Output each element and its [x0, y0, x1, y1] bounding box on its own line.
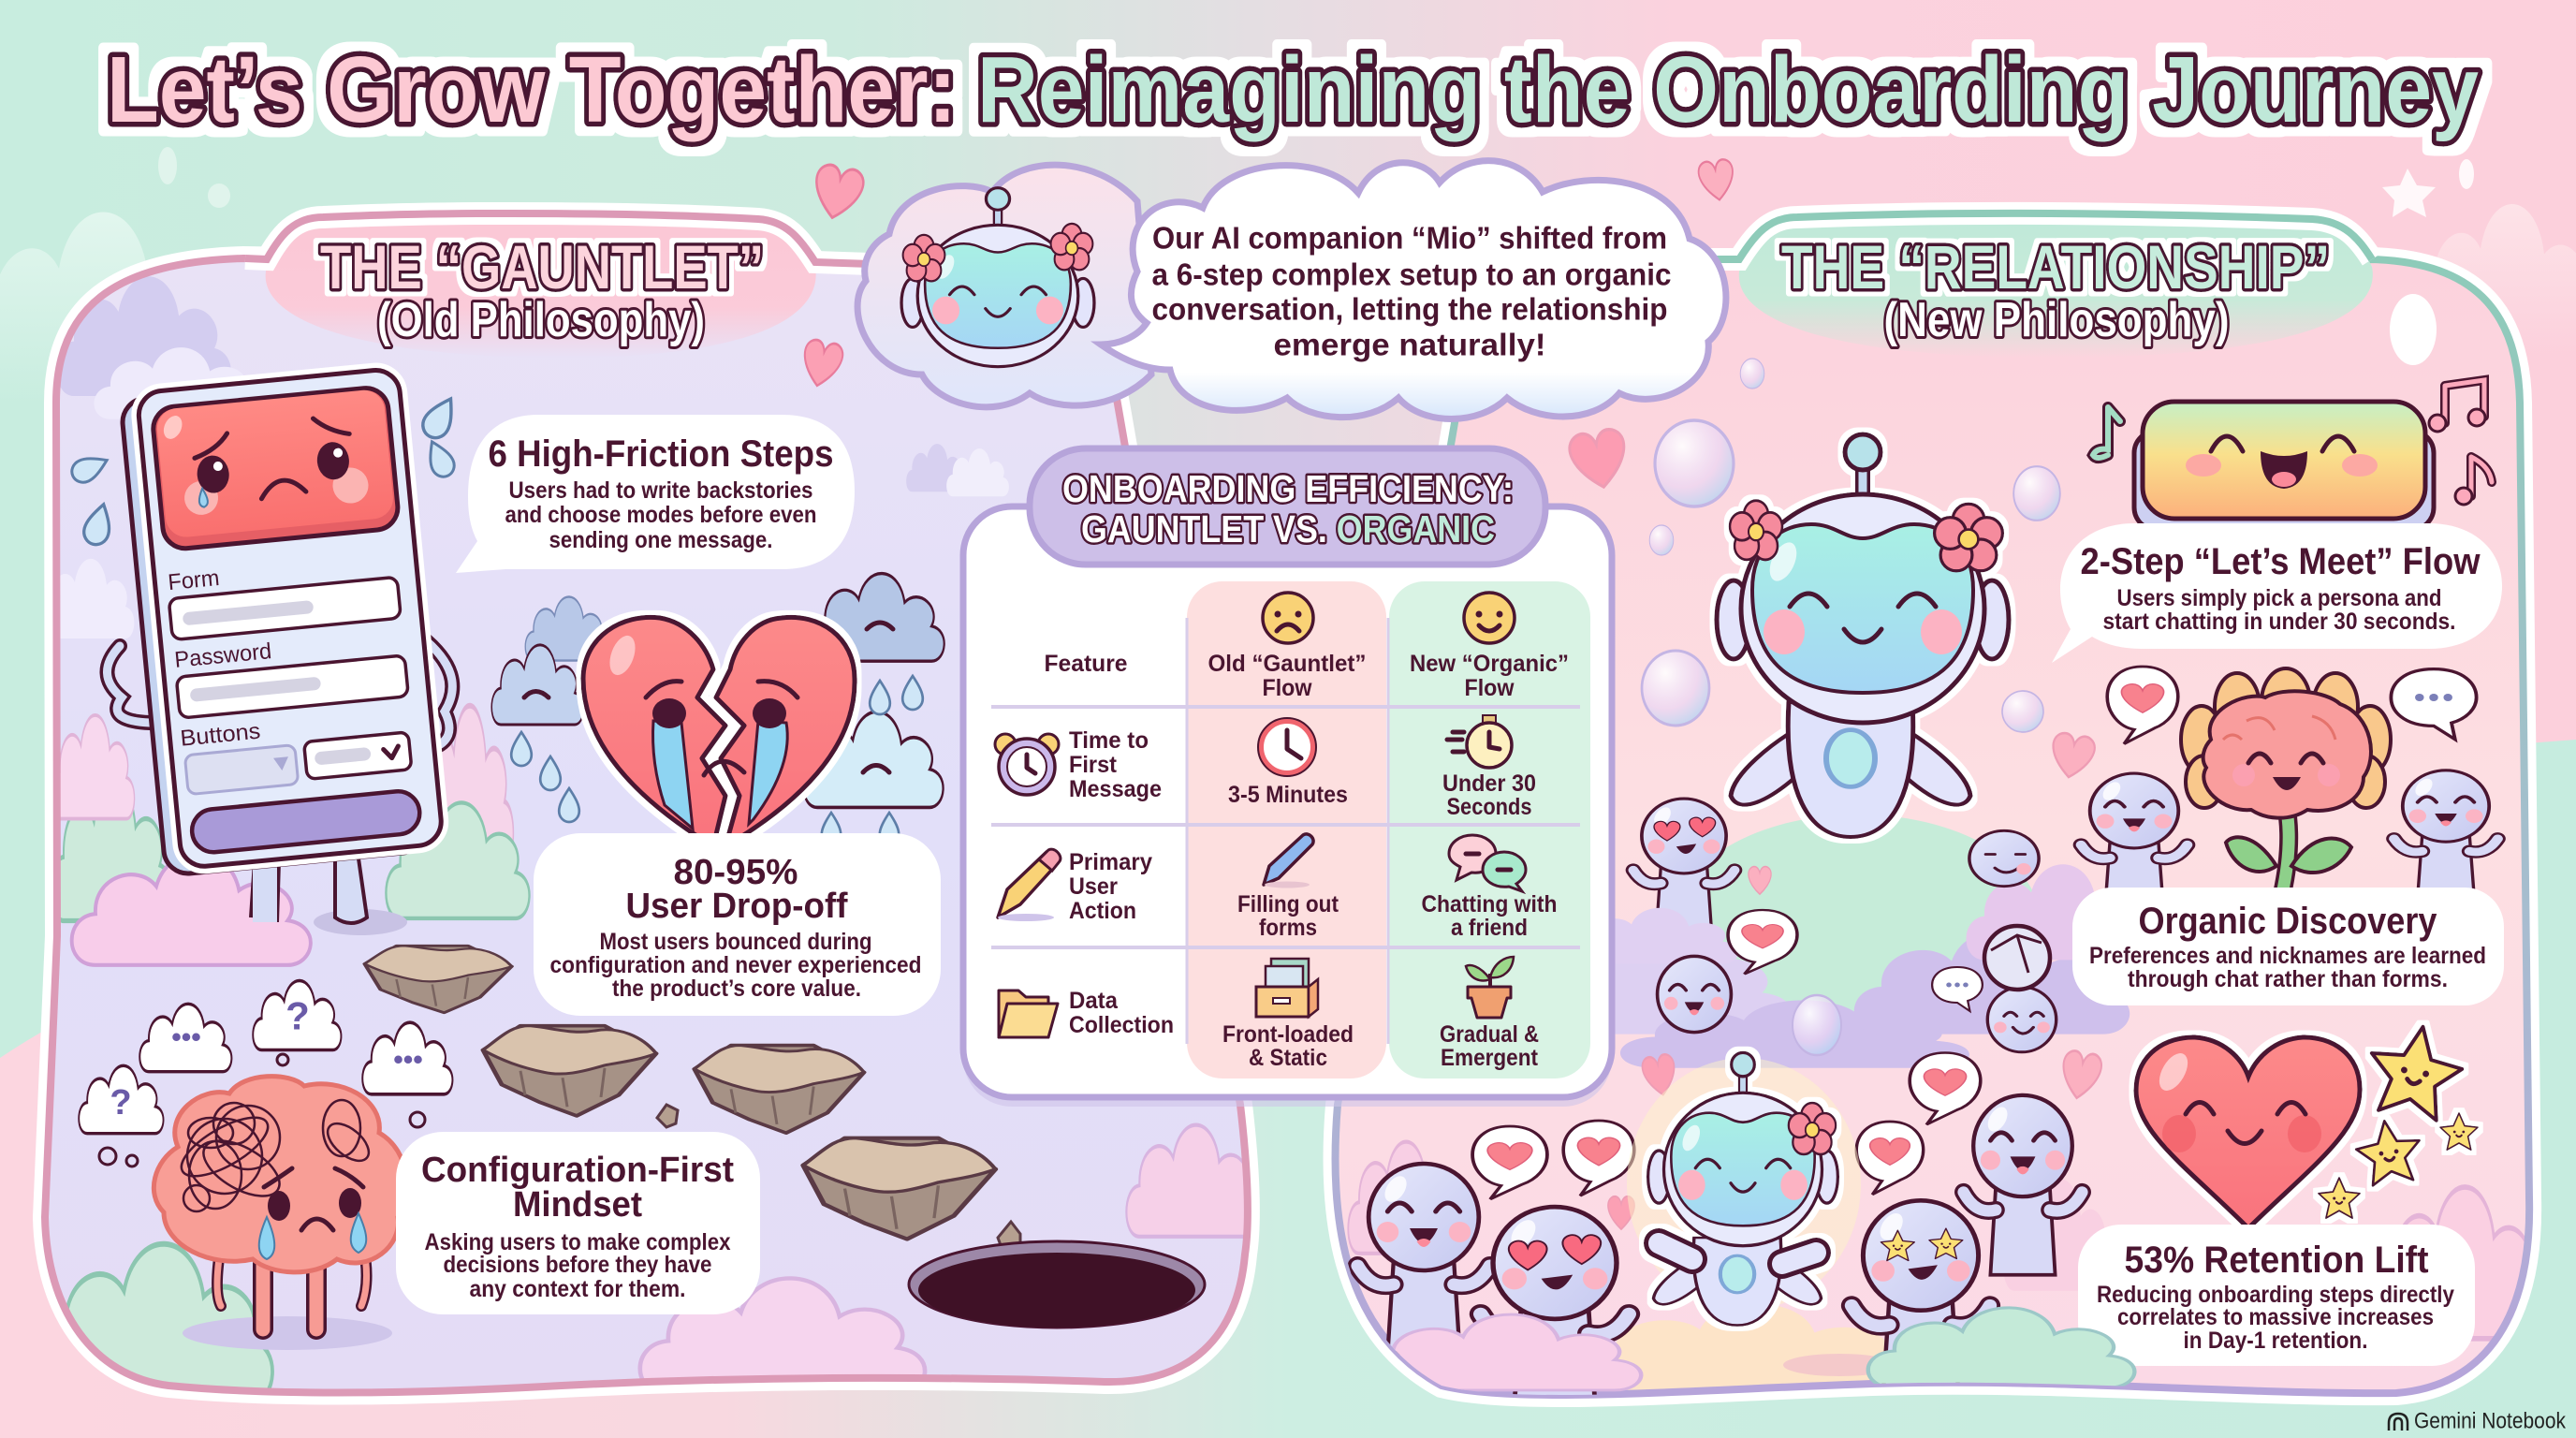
callout: 2-step let's meet flow: 2-Step “Let’s Meet” Flow: [2080, 541, 2481, 582]
table row: primary user action: a friend: [1451, 915, 1528, 941]
heading: the relationship: THE “RELATIONSHIP”: [1781, 232, 2330, 301]
callout: 80-95% user drop-off: User Drop-off: [625, 887, 848, 926]
table columns: [991, 581, 1590, 1078]
form labels and fields: Password: [173, 638, 272, 673]
community cloud garden background: [1320, 758, 2543, 1391]
title: Let’s Grow Together:: [107, 37, 957, 142]
table row: time to first message: [995, 715, 1536, 820]
icon: happy people beside flower: [2081, 667, 2497, 906]
table header row: [1045, 593, 1569, 701]
callout: 80-95% user drop-off: the product’s core value.: [612, 976, 861, 1002]
icon: confused thought clouds: [79, 980, 452, 1167]
icon: brain flower: [2181, 668, 2391, 894]
callout: 53% retention lift: Reducing onboarding steps directly: [2097, 1282, 2454, 1308]
icon: smiling stars: [2319, 1019, 2478, 1218]
table row: primary user action: Primary: [1069, 849, 1152, 875]
callout: 53% retention lift: 53% Retention Lift: [2125, 1240, 2428, 1281]
icon: sad form phone character: [68, 368, 461, 935]
table row: data collection: & Static: [1249, 1045, 1327, 1071]
icon: decorative hearts: [1567, 427, 2103, 1229]
callout: 6 high-friction steps: and choose modes before even: [505, 502, 816, 528]
table row: data collection: Emergent: [1441, 1045, 1539, 1071]
speech bubble: mio story: conversation, letting the relationship: [1151, 292, 1668, 326]
table header row: Old “Gauntlet”: [1208, 651, 1367, 677]
icon: mio robot: [1717, 434, 2009, 837]
callout: organic discovery: Preferences and nicknames are learned: [2089, 943, 2486, 969]
speech bubble: mio story: a 6-step complex setup to an organic: [1151, 257, 1672, 292]
panel: the gauntlet (old philosophy): [42, 213, 1259, 1403]
icon: confused thought clouds: ?: [110, 1083, 132, 1123]
table row: primary user action: [998, 834, 1558, 941]
icon: crying clouds and rain: [491, 574, 944, 873]
speech bubble: mio story: Our AI companion “Mio” shifted from: [1152, 221, 1667, 255]
table row: primary user action: Filling out: [1237, 891, 1339, 917]
table row: data collection: [999, 957, 1539, 1071]
callout: 2-step let's meet flow: start chatting in under 30 seconds.: [2102, 609, 2456, 635]
table row: data collection: Gradual &: [1440, 1021, 1539, 1048]
icon: drop-off hole: [909, 1241, 1205, 1328]
icon: broken crying heart: [583, 617, 855, 846]
icon: smiling button with music notes: [2093, 380, 2492, 530]
callout: 80-95% user drop-off: configuration and never experienced: [550, 952, 921, 978]
form labels and fields: [164, 549, 421, 855]
callout: 6 high-friction steps: 6 High-Friction Steps: [489, 433, 833, 475]
icon: confused thought clouds: •••: [171, 1022, 201, 1052]
table row: data collection: Front-loaded: [1222, 1021, 1354, 1048]
heading: the gauntlet: THE “GAUNTLET”: [320, 232, 764, 301]
title: [107, 37, 2479, 142]
table row: time to first message: Message: [1069, 776, 1162, 802]
music notes: [2093, 380, 2492, 505]
callout: 53% retention lift: correlates to massive increases: [2117, 1304, 2434, 1330]
callout: organic discovery: through chat rather than forms.: [2128, 966, 2448, 992]
table panel: onboarding efficiency: [963, 448, 1612, 1107]
callout: organic discovery: Organic Discovery: [2138, 901, 2437, 942]
table row: data collection: Data: [1069, 988, 1119, 1014]
callout: 80-95% user drop-off: Most users bounced during: [599, 929, 872, 955]
icon: crumbling stepping stones: [365, 946, 1020, 1253]
speech bubble: mio story: emerge naturally!: [1273, 328, 1546, 361]
callout: organic discovery: [2072, 888, 2504, 1005]
form labels and fields: Form: [167, 565, 221, 595]
table row: time to first message: Time to: [1069, 727, 1149, 754]
banner: the relationship: [1699, 213, 2373, 358]
callout: configuration-first mindset: decisions before they have: [444, 1252, 712, 1278]
form labels and fields: Buttons: [179, 719, 262, 752]
banner: the gauntlet: [245, 213, 871, 358]
subheading: old philosophy: (Old Philosophy): [377, 293, 705, 347]
table header row: Flow: [1464, 675, 1515, 701]
table row: data collection: Collection: [1069, 1012, 1174, 1038]
speech bubble: mio story: [1101, 161, 1726, 419]
table title pill: GAUNTLET VS. ORGANIC: [1081, 507, 1495, 550]
callout: 2-step let's meet flow: Users simply pick a persona and: [2117, 585, 2441, 611]
table row: time to first message: 3-5 Minutes: [1228, 782, 1348, 808]
table title pill: ONBOARDING EFFICIENCY:: [1062, 467, 1514, 510]
callout: 53% retention lift: [2078, 1225, 2475, 1366]
callout: configuration-first mindset: Mindset: [513, 1185, 642, 1225]
table title pill: [1030, 448, 1545, 565]
icon: tangled confused brain: [154, 1077, 407, 1350]
decorative clouds: left panel: [42, 276, 1259, 1403]
table header row: Feature: [1045, 651, 1128, 677]
callout: configuration-first mindset: [396, 1132, 760, 1314]
icon: celebrating crowd and mio: [1357, 1052, 2134, 1405]
callout: 6 high-friction steps: [456, 415, 855, 573]
callout: configuration-first mindset: any context for them.: [470, 1276, 685, 1302]
callout: 80-95% user drop-off: [534, 833, 941, 1016]
callout: configuration-first mindset: Configuration-First: [421, 1151, 734, 1190]
table header row: New “Organic”: [1410, 651, 1569, 677]
callout: 6 high-friction steps: Users had to write backstories: [509, 477, 812, 504]
icon: small happy people in cloud garden: [1573, 799, 2056, 1052]
icon: floating bubbles: [1642, 359, 2060, 1055]
table row: primary user action: forms: [1259, 915, 1317, 941]
icon: floating hearts: [798, 158, 1736, 389]
icon: confused thought clouds: ?: [285, 994, 310, 1037]
callout: configuration-first mindset: Asking users to make complex: [425, 1229, 731, 1255]
icon: happy heart: [2136, 1037, 2360, 1228]
table row: time to first message: First: [1069, 752, 1118, 778]
thought bubble: robot mio: [857, 165, 1151, 407]
subheading: new philosophy: (New Philosophy): [1883, 293, 2230, 347]
callout: 80-95% user drop-off: 80-95%: [674, 853, 798, 892]
table header row: Flow: [1262, 675, 1312, 701]
panel: the relationship (new philosophy): [1320, 213, 2543, 1405]
table row: primary user action: User: [1069, 873, 1118, 900]
callout: 2-step let's meet flow: [2052, 523, 2502, 663]
icon: confused thought clouds: •••: [393, 1045, 423, 1075]
table row: time to first message: Under 30: [1442, 770, 1536, 797]
callout: 6 high-friction steps: sending one message.: [549, 527, 773, 553]
callout: 53% retention lift: in Day-1 retention.: [2183, 1328, 2368, 1354]
table row: primary user action: Action: [1069, 898, 1136, 924]
table row: primary user action: Chatting with: [1421, 891, 1558, 917]
table row: time to first message: Seconds: [1447, 794, 1531, 820]
